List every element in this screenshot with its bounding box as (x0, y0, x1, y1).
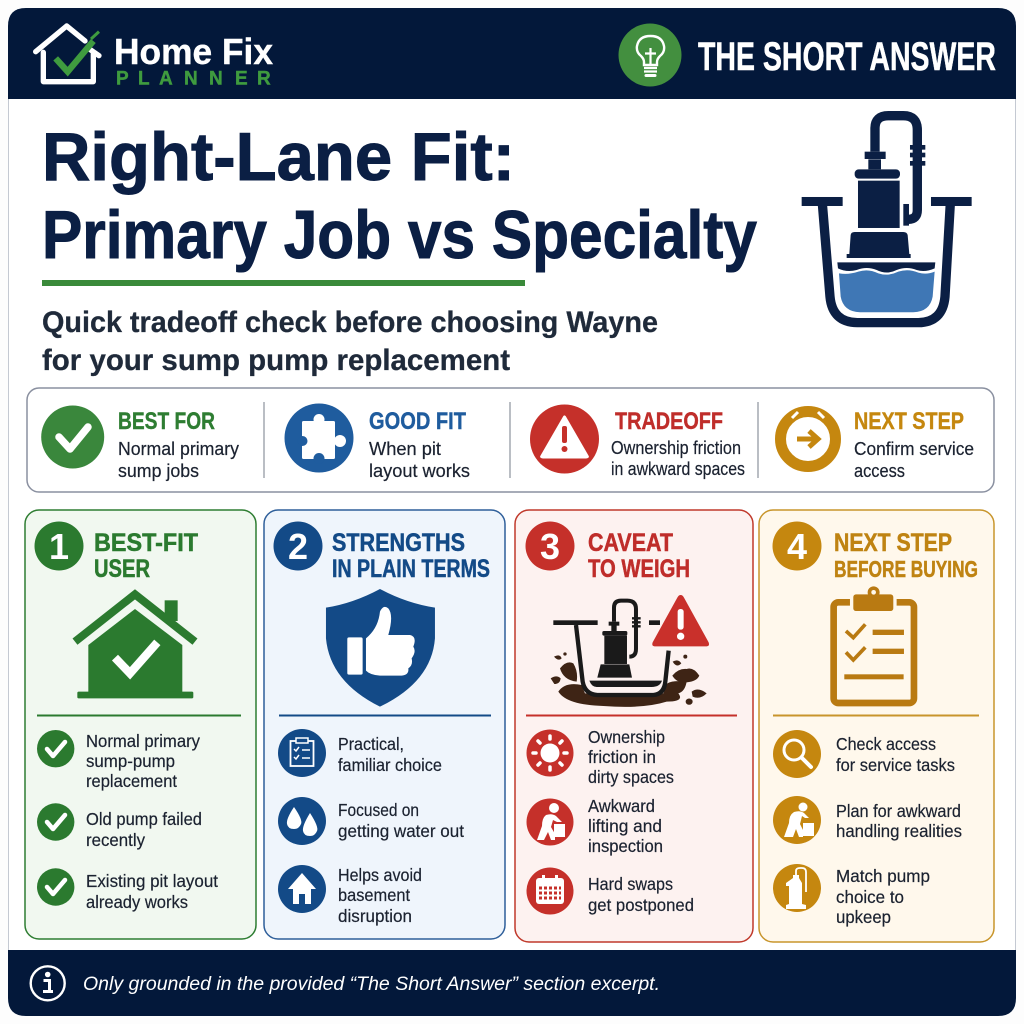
icon: muddy pump pit with warning (551, 595, 709, 707)
next step text (854, 408, 974, 481)
panel: strengths (264, 510, 505, 939)
list: best-fit items (37, 730, 218, 912)
item: match pump: choice to (836, 887, 904, 907)
title (42, 119, 757, 273)
heading (834, 529, 978, 582)
item: match pump: upkeep (836, 907, 891, 927)
item: awkward lifting: inspection (588, 836, 663, 856)
summary: good fit (284, 404, 470, 481)
item: ownership friction: Ownership (588, 727, 665, 747)
number badge 3: 3 (540, 526, 560, 567)
logo sub-wordmark: PLANNER (116, 68, 271, 90)
title: Primary Job vs Specialty (42, 197, 757, 273)
good fit text: When pit (369, 439, 441, 459)
item: old pump failed: recently (86, 830, 145, 850)
section badge: the short answer (618, 24, 996, 86)
footer note: Only grounded in the provided “The Short Answer” section excerpt. (83, 974, 660, 995)
item: ownership friction (526, 727, 674, 787)
item: normal primary: sump-pump (86, 751, 175, 771)
icon: light bulb (618, 24, 682, 86)
panel: best-fit user (25, 510, 256, 939)
item: helps avoid disruption: Helps avoid (338, 865, 422, 885)
number badge 4 (772, 522, 822, 570)
heading: BEST-FIT (94, 529, 198, 557)
item: hard swaps: get postponed (588, 895, 694, 915)
summary: best for (41, 406, 239, 481)
item: helps avoid disruption: disruption (338, 906, 412, 926)
heading: STRENGTHS (332, 529, 465, 557)
tradeoff text: in awkward spaces (611, 459, 745, 479)
item: focused on water: getting water out (338, 821, 464, 841)
footer bar (8, 950, 1016, 1016)
item: awkward lifting: Awkward (588, 796, 655, 816)
heading: TO WEIGH (588, 555, 690, 583)
icon: check (41, 406, 104, 468)
item: plan for handling (773, 796, 962, 844)
icon: warning (530, 404, 599, 474)
item: practical (278, 729, 442, 777)
tradeoff text: Ownership friction (611, 438, 741, 458)
next step text: access (854, 461, 905, 481)
item: ownership friction: friction in (588, 747, 656, 767)
number badge 2: 2 (288, 526, 308, 567)
item: helps avoid disruption (278, 865, 422, 926)
item: focused on water (278, 797, 464, 845)
item: awkward lifting: lifting and (588, 816, 662, 836)
subtitle: for your sump pump replacement (42, 344, 510, 377)
next step text: Confirm service (854, 439, 974, 459)
item: ownership friction: dirty spaces (588, 767, 674, 787)
icon: puzzle (284, 404, 354, 472)
item: awkward lifting (526, 796, 663, 856)
heading: IN PLAIN TERMS (332, 555, 490, 583)
good fit text (369, 408, 470, 481)
good fit text: layout works (369, 461, 470, 481)
icon: clipboard checklist (834, 586, 914, 703)
item: normal primary (37, 730, 200, 791)
icon: house with check (75, 594, 195, 698)
summary: tradeoff (530, 404, 745, 479)
item: match pump (773, 864, 930, 927)
header bar (8, 8, 1016, 99)
icon: info (31, 966, 65, 1000)
logo wordmark: Home Fix (114, 31, 273, 72)
item: practical: familiar choice (338, 755, 442, 775)
tradeoff text (611, 408, 745, 479)
item: existing pit layout: already works (86, 892, 188, 912)
heading: CAVEAT (588, 529, 673, 557)
good fit text: GOOD FIT (369, 408, 466, 435)
best for text: BEST FOR (118, 408, 215, 435)
title underline (42, 280, 525, 286)
item: plan for handling: handling realities (836, 821, 962, 841)
panel: next step (759, 510, 994, 942)
item: hard swaps: Hard swaps (588, 874, 673, 894)
best for text (118, 408, 239, 481)
heading (332, 529, 490, 583)
item: check access: for service tasks (836, 755, 955, 775)
item: old pump failed (37, 803, 202, 850)
number badge 1 (34, 522, 84, 570)
item: check access: Check access (836, 734, 936, 754)
item: check access (773, 730, 955, 778)
best for text: Normal primary (118, 439, 239, 459)
list: next-step items (773, 730, 962, 927)
number badge 3 (526, 522, 574, 570)
item: normal primary: Normal primary (86, 731, 200, 751)
item: plan for handling: Plan for awkward (836, 801, 961, 821)
logo: Home Fix Planner (36, 26, 273, 89)
heading (94, 529, 198, 583)
item: focused on water: Focused on (338, 800, 419, 820)
item: helps avoid disruption: basement (338, 885, 410, 905)
panel: caveat (515, 510, 753, 942)
item: existing pit layout: Existing pit layout (86, 871, 218, 891)
item: old pump failed: Old pump failed (86, 809, 202, 829)
tradeoff text: TRADEOFF (615, 408, 723, 435)
icon: timer arrow (780, 412, 836, 466)
icon: shield with thumbs up (326, 589, 435, 707)
item: match pump: Match pump (836, 866, 930, 886)
heading: USER (94, 555, 150, 583)
heading: BEFORE BUYING (834, 556, 978, 582)
summary: next step (780, 408, 974, 481)
list: strengths items (278, 729, 464, 926)
number badge 4: 4 (787, 526, 807, 567)
panel: summary strip (27, 388, 994, 492)
title: Right-Lane Fit: (42, 119, 515, 195)
number badge 1: 1 (49, 526, 69, 567)
list: caveat items (526, 727, 694, 915)
item: existing pit layout (37, 868, 218, 912)
heading (588, 529, 690, 583)
best for text: sump jobs (118, 461, 199, 481)
next step text: NEXT STEP (854, 408, 964, 435)
icon: sump pump in pit (802, 116, 972, 323)
heading: NEXT STEP (834, 529, 952, 557)
item: normal primary: replacement (86, 771, 177, 791)
number badge 2 (274, 522, 322, 570)
item: practical: Practical, (338, 734, 404, 754)
icon: house with check (36, 26, 99, 82)
subtitle (42, 306, 658, 377)
item: hard swaps (526, 868, 694, 915)
subtitle: Quick tradeoff check before choosing Wayne (42, 306, 658, 339)
